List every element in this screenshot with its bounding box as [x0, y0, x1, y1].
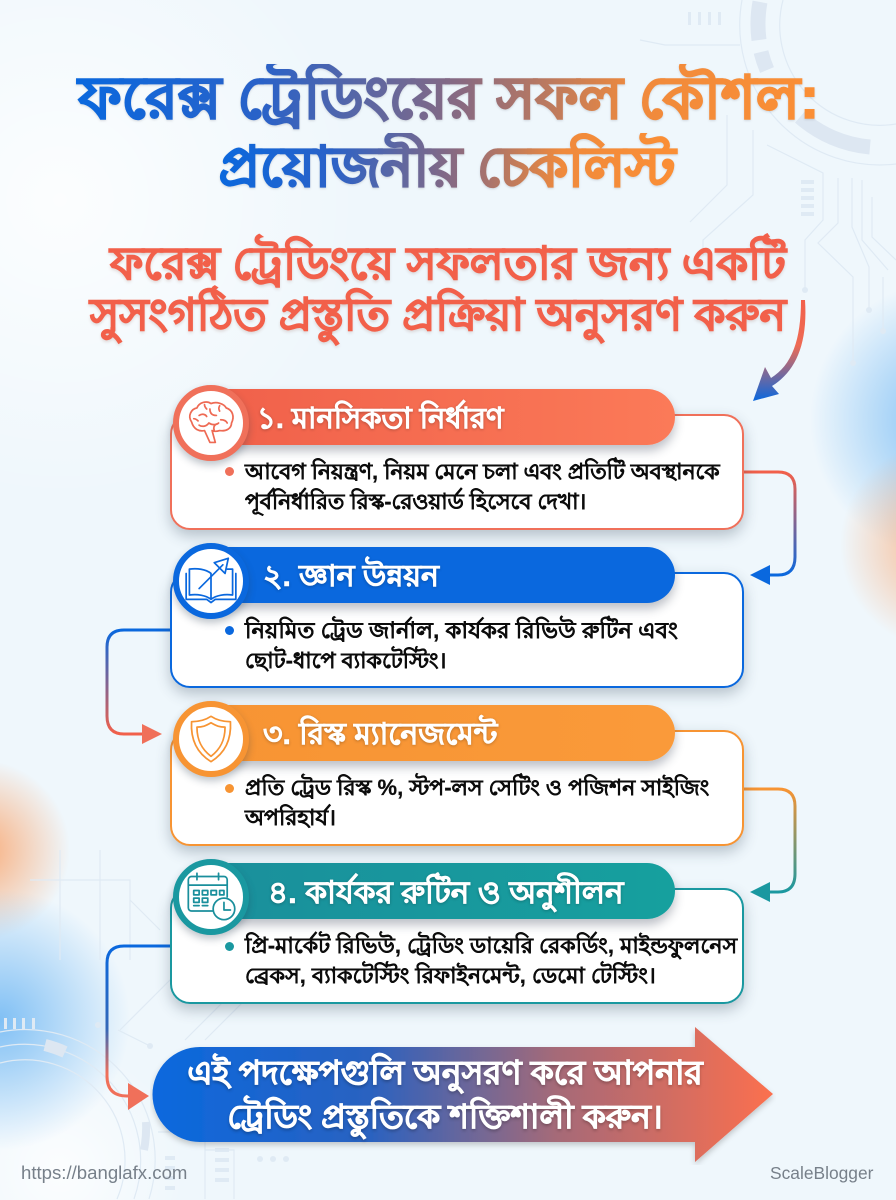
text 3: অপরিহার্য। — [245, 805, 336, 830]
panel: step 2 knowledge — [162, 542, 752, 702]
text 3 — [244, 772, 710, 830]
header 1: ১. মানসিকতা নির্ধারণ — [257, 403, 503, 435]
header 2 — [205, 547, 675, 603]
call to action text: এই পদক্ষেপগুলি অনুসরণ করে আপনার — [187, 1054, 703, 1091]
header 1 — [205, 389, 675, 445]
text 1: পূর্বনির্ধারিত রিস্ক-রেওয়ার্ড হিসেবে দেখা। — [245, 489, 586, 514]
arrow: subtitle to step 1 — [753, 300, 806, 401]
text 1: আবেগ নিয়ন্ত্রণ, নিয়ম মেনে চলা এবং প্রতিটি অবস্থানকে — [245, 459, 720, 484]
bullet 2 — [225, 626, 234, 635]
text 1 — [244, 456, 720, 516]
subtitle — [88, 233, 788, 348]
text 3: প্রতি ট্রেড রিস্ক %, স্টপ-লস সেটিং ও পজিশন সাইজিং — [245, 775, 709, 800]
card body 3 — [170, 730, 744, 846]
title — [76, 64, 819, 198]
title: প্রয়োজনীয় চেকলিস্ট — [219, 136, 675, 198]
text 4: ব্রেকস, ব্যাকটেস্টিং রিফাইনমেন্ট, ডেমো টেস্টিং। — [245, 963, 656, 988]
card body 1 — [170, 414, 744, 530]
arrow: step 4 to call to action — [106, 944, 170, 1110]
text 4 — [244, 930, 738, 988]
panel: step 3 risk management — [162, 700, 752, 860]
text 2: ছোট-ধাপে ব্যাকটেস্টিং। — [245, 648, 446, 673]
icon: shield — [173, 701, 249, 777]
call to action text: ট্রেডিং প্রস্তুতিকে শক্তিশালী করুন। — [227, 1098, 663, 1135]
text 2: নিয়মিত ট্রেড জার্নাল, কার্যকর রিভিউ রুটিন এবং — [245, 617, 678, 643]
subtitle: সুসংগঠিত প্রস্তুতি প্রক্রিয়া অনুসরণ করুন — [90, 291, 786, 340]
header 4: ৪. কার্যকর রুটিন ও অনুশীলন — [268, 875, 623, 910]
bullet 1 — [225, 467, 234, 476]
bullet 3 — [225, 784, 234, 793]
icon: book with arrow — [173, 543, 249, 619]
panel: step 1 mindset — [162, 384, 752, 544]
call to action text — [187, 1052, 705, 1142]
subtitle: ফরেক্স ট্রেডিংয়ে সফলতার জন্য একটি — [110, 238, 786, 289]
footer: site url: https://banglafx.com — [21, 1162, 187, 1183]
card body 4 — [170, 888, 744, 1004]
header 2: ২. জ্ঞান উন্নয়ন — [263, 560, 439, 593]
title: ফরেক্স ট্রেডিংয়ের সফল কৌশল: — [79, 65, 819, 131]
call to action arrow — [150, 1027, 774, 1165]
card body 2 — [170, 572, 744, 688]
footer: brand: ScaleBlogger — [770, 1163, 873, 1183]
icon: brain — [173, 385, 249, 461]
header 3 — [205, 705, 675, 761]
text 2 — [244, 615, 678, 673]
header 4 — [205, 863, 675, 919]
arrow: step 2 to step 3 — [106, 628, 170, 744]
text 4: প্রি-মার্কেট রিভিউ, ট্রেডিং ডায়েরি রেকর্ডিং, মাইন্ডফুলনেস — [245, 933, 737, 958]
header 3: ৩. রিস্ক ম্যানেজমেন্ট — [263, 718, 497, 751]
arrow: step 1 to step 2 — [744, 470, 796, 585]
icon: calendar with clock — [173, 859, 249, 935]
bullet 4 — [225, 942, 234, 951]
arrow: step 3 to step 4 — [744, 788, 796, 902]
